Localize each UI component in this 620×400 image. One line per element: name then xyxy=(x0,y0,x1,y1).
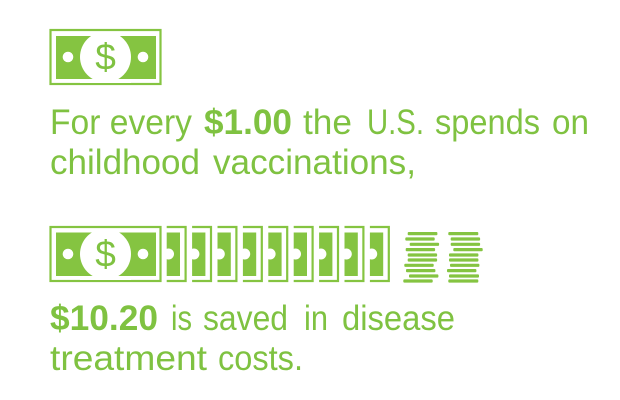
text: savings statement xyxy=(50,299,455,378)
text: intro statement xyxy=(50,103,589,182)
icon: first coin stack xyxy=(403,232,439,283)
icon: single dollar bill: $ xyxy=(95,36,116,78)
text: intro statement: vaccinations, xyxy=(213,143,416,182)
icon: front dollar bill xyxy=(50,227,160,281)
text: savings statement: $10.20 xyxy=(50,299,158,338)
text: intro statement: $1.00 xyxy=(204,103,292,142)
text: savings statement: is xyxy=(171,299,192,338)
text: intro statement: childhood xyxy=(50,143,200,182)
text: intro statement: U.S. xyxy=(367,103,424,142)
text: savings statement: treatment xyxy=(50,339,207,378)
icon: stacked bill edges xyxy=(163,227,389,281)
text: savings statement: disease xyxy=(342,299,455,338)
icon: single dollar bill xyxy=(50,30,160,84)
text: intro statement: the xyxy=(303,103,352,142)
text: savings statement: in xyxy=(304,299,328,338)
icon: row of ten dollar bills xyxy=(50,227,389,281)
icon: front dollar bill: $ xyxy=(95,234,116,274)
text: savings statement: saved xyxy=(203,299,288,338)
icon: second coin stack xyxy=(447,232,483,283)
text: savings statement: costs. xyxy=(218,339,303,378)
text: intro statement: spends xyxy=(435,103,540,142)
text: intro statement: on xyxy=(552,103,589,142)
text: intro statement: For every xyxy=(50,103,192,142)
